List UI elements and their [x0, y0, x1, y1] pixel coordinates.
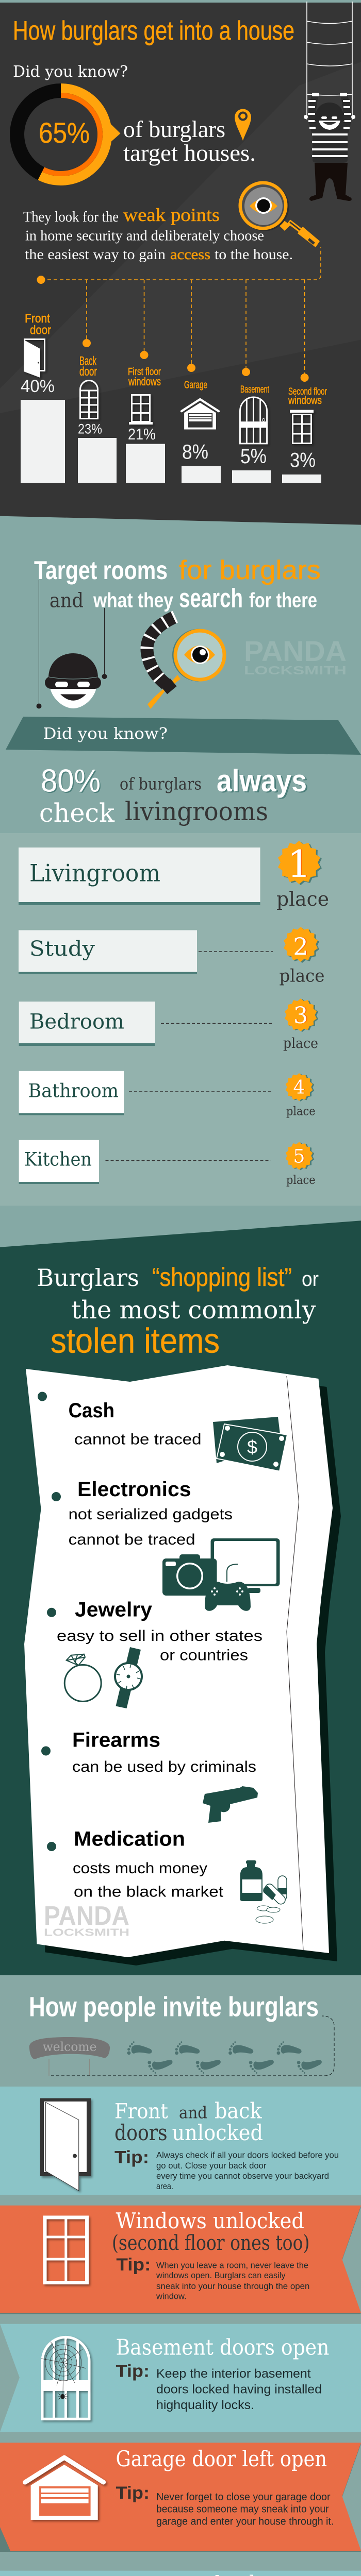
bar: garage 8%: 8%	[182, 441, 208, 464]
room: bathroom, 4th place: 4	[294, 1077, 306, 1098]
panel: shopping list	[0, 1221, 361, 1975]
room: study, 2nd place: 2	[294, 933, 309, 960]
room: study, 2nd place	[19, 927, 325, 986]
bar: basement 5%: Basement	[240, 384, 269, 395]
room: bedroom, 3rd place: 3	[293, 1003, 308, 1029]
watermark: panda locksmith: PANDA	[44, 1901, 129, 1931]
icon: basement window with spider web	[41, 2337, 91, 2419]
heading: target rooms for burglars: Target rooms	[34, 556, 168, 585]
text: 80 percent of burglars always check livingrooms: livingrooms	[125, 796, 268, 826]
room: bathroom, 4th place	[19, 1071, 316, 1118]
icon: tablet, camera and game controller	[162, 1538, 280, 1611]
bar: front door 40%: Front	[25, 312, 50, 326]
room: study, 2nd place: 2	[293, 933, 308, 960]
item: medication: on the black market	[74, 1883, 224, 1900]
heading: burglars shopping list: or	[302, 1268, 319, 1291]
room: bedroom, 3rd place: place	[283, 1036, 318, 1052]
item: electronics	[69, 1478, 280, 1611]
icon: magnifying glass with eye	[238, 181, 320, 247]
heading: target rooms for burglars: for there	[249, 589, 317, 612]
icon: window	[45, 2217, 87, 2282]
room: livingroom, 1st place: 1	[288, 842, 312, 886]
bar: back door 23%: Back	[79, 354, 97, 368]
tip panel: basement doors open: Basement doors open	[116, 2335, 329, 2360]
bar: first floor windows 21%: windows	[128, 375, 161, 388]
text: weak points: to the house.	[215, 247, 293, 263]
text: of burglars target houses: target houses.	[123, 140, 256, 166]
bar: garage 8%: Garage	[184, 380, 207, 391]
bar: back door 23%	[78, 354, 117, 483]
room: kitchen, 5th place: 5	[293, 1146, 305, 1167]
donut chart: 65 percent: 65%	[39, 116, 90, 149]
item: firearms	[72, 1729, 258, 1823]
text: 80 percent of burglars always check livingrooms: 80%	[42, 765, 102, 800]
welcome sign: welcome	[43, 2040, 97, 2054]
item: electronics: Electronics	[77, 1478, 191, 1501]
title: How burglars get into a house	[13, 16, 294, 46]
item: cash: Cash	[69, 1399, 114, 1422]
subheading: did you know: Did you know?	[13, 63, 128, 81]
item: electronics: not serialized gadgets	[69, 1506, 233, 1523]
room: bedroom, 3rd place	[19, 998, 318, 1052]
tip panel: basement doors open: highquality locks.	[156, 2398, 254, 2412]
tip panel: doors unlocked	[0, 2087, 361, 2195]
item: jewelry: or countries	[160, 1647, 248, 1664]
panel: how people invite burglars	[0, 1975, 361, 2576]
tip panel: doors unlocked: area.	[156, 2181, 173, 2191]
bar: first floor windows 21%: First floor	[128, 366, 161, 378]
connector dots	[37, 276, 309, 382]
item: cash	[69, 1399, 287, 1471]
bar: back door 23%: 23%	[78, 421, 102, 436]
tip panel: windows unlocked: Tip:	[116, 2255, 151, 2275]
dashed connector lines	[41, 247, 321, 375]
heading: target rooms for burglars: and	[50, 589, 84, 612]
room: livingroom, 1st place: place	[276, 888, 329, 910]
paper shadow	[32, 1374, 341, 1965]
heading: target rooms for burglars	[34, 555, 321, 614]
dashed path	[51, 2016, 334, 2076]
item: medication: Medication	[74, 1827, 185, 1850]
burglar mask on strings	[36, 580, 107, 709]
bar: basement 5%: 5%	[240, 445, 267, 468]
tip panel: windows unlocked: window.	[156, 2292, 187, 2301]
tip panel: garage door left open: garage and enter your house through it.	[156, 2516, 334, 2527]
bar: first floor windows 21%: 21%	[128, 425, 156, 443]
tip panel: windows unlocked	[0, 2206, 361, 2314]
heading: burglars shopping list	[37, 1263, 319, 1360]
icon: footprints	[127, 2041, 323, 2075]
item: jewelry	[57, 1599, 262, 1708]
tip panel: basement doors open: Keep the interior basement	[156, 2367, 311, 2381]
text: weak points: the easiest way to gain	[25, 247, 166, 263]
icon: diamond ring	[64, 1654, 101, 1701]
panel background: room ranking	[0, 833, 361, 1206]
tip panel: doors unlocked: Always check if all your doors locked before you	[156, 2150, 339, 2160]
icon: banknotes: $	[247, 1436, 257, 1458]
room: kitchen, 5th place: 5	[294, 1146, 306, 1167]
tip panel: basement doors open: Tip:	[116, 2362, 150, 2381]
item: electronics: cannot be traced	[69, 1531, 195, 1548]
bar: front door 40%	[21, 312, 65, 483]
room: kitchen, 5th place: place	[286, 1174, 316, 1187]
text: 80 percent of burglars always check livingrooms: of burglars	[120, 774, 202, 794]
donut chart: 65 percent	[14, 88, 121, 181]
bar: front door 40%: 40%	[21, 377, 55, 396]
text: 80 percent of burglars always check livingrooms: 80%	[41, 764, 101, 799]
heading: burglars shopping list: Burglars	[37, 1264, 139, 1292]
icon: wrist watch	[115, 1647, 142, 1708]
text: 80 percent of burglars always check livingrooms: always	[217, 764, 307, 798]
tip panel: garage door left open: Never forget to close your garage door	[156, 2492, 331, 2503]
text: weak points: weak points	[123, 205, 220, 225]
item: medication	[73, 1827, 287, 1923]
heading: target rooms for burglars: what they	[93, 589, 174, 612]
bar: garage 8%	[182, 380, 221, 483]
burglar hanging on a rope ladder	[304, 2, 355, 201]
item: medication: costs much money	[73, 1860, 207, 1877]
icon: pistol	[203, 1786, 258, 1823]
heading: target rooms for burglars: for burglars	[179, 555, 321, 585]
bar: second floor windows 3%: windows	[288, 395, 322, 406]
heading: burglars shopping list: the most commonly	[71, 1296, 316, 1325]
heading: burglars shopping list: “shopping list”	[152, 1263, 292, 1292]
tip panel: basement doors open	[0, 2324, 361, 2432]
tip panel: windows unlocked: (second floor ones too)	[112, 2231, 309, 2255]
item: jewelry: easy to sell in other states	[57, 1628, 262, 1645]
room: bathroom, 4th place: 4	[293, 1077, 305, 1098]
icon: arm holding magnifying glass	[147, 617, 226, 709]
tip panel: windows unlocked: windows open. Burglars can easily	[156, 2270, 286, 2280]
tip panel: doors unlocked: Tip:	[114, 2147, 149, 2167]
bar: second floor windows 3%	[282, 386, 327, 483]
room: study, 2nd place: place	[280, 965, 325, 986]
room: livingroom, 1st place: 1	[287, 842, 311, 886]
text: weak points: in home security and deliberately choose	[25, 228, 264, 244]
icon: location pin	[235, 109, 251, 141]
tip panel: garage door left open: Garage door left open	[116, 2446, 327, 2471]
room: bedroom, 3rd place: 3	[294, 1003, 309, 1029]
banner: did you know	[6, 717, 361, 755]
icon: pills and bottle	[240, 1860, 287, 1923]
tip panel: windows unlocked: When you leave a room, never leave the	[156, 2261, 308, 2270]
room: bathroom, 4th place: Bathroom	[28, 1081, 119, 1102]
icon: banknotes	[213, 1417, 287, 1471]
room: bathroom, 4th place: place	[286, 1105, 316, 1118]
tip panel: doors unlocked: every time you cannot observe your backyard	[156, 2171, 329, 2181]
text: of burglars target houses	[123, 116, 256, 166]
bar: second floor windows 3%: 3%	[290, 449, 316, 472]
icon: open door	[40, 2098, 91, 2191]
tip panel: overgrown shrubs	[0, 2571, 361, 2576]
heading: burglars shopping list: stolen items	[51, 1321, 220, 1360]
tip panel: garage door left open: because someone may sneak into your	[156, 2504, 329, 2515]
room: kitchen, 5th place: Kitchen	[24, 1149, 92, 1171]
text: 80 percent of burglars always check livingrooms: always	[218, 765, 308, 799]
item: firearms: can be used by criminals	[72, 1758, 256, 1775]
tip panel: doors unlocked: and	[179, 2103, 207, 2123]
text: 80 percent of burglars always check livingrooms: check	[39, 798, 115, 828]
room: livingroom, 1st place: Livingroom	[29, 859, 160, 887]
bar: back door 23%: door	[79, 365, 97, 379]
room: bedroom, 3rd place: Bedroom	[29, 1010, 124, 1033]
room: livingroom, 1st place	[19, 841, 329, 910]
text: weak points: They look for the	[23, 209, 119, 225]
bar: first floor windows 21%	[126, 366, 165, 483]
tip panel: garage door left open	[0, 2443, 361, 2552]
item: firearms: Firearms	[72, 1729, 160, 1752]
tip panel: doors unlocked: doors	[114, 2120, 168, 2145]
panel: target rooms	[0, 555, 361, 1206]
tip panel: doors unlocked: back	[215, 2098, 262, 2124]
tip panel: doors unlocked: unlocked	[172, 2120, 263, 2145]
icon: garage	[25, 2458, 104, 2520]
watermark: panda locksmith: PANDA	[244, 635, 347, 667]
room: kitchen, 5th place	[19, 1140, 316, 1187]
tip panel: windows unlocked: Windows unlocked	[116, 2208, 304, 2233]
text: of burglars target houses: of burglars	[123, 116, 225, 142]
tip panel: garage door left open: Tip:	[116, 2483, 150, 2503]
bar: front door 40%: door	[30, 324, 51, 337]
watermark: panda locksmith: LOCKSMITH	[44, 1927, 129, 1939]
heading: target rooms for burglars: search	[179, 584, 243, 614]
watermark: panda locksmith: LOCKSMITH	[244, 664, 347, 677]
bar: second floor windows 3%: Second floor	[288, 386, 327, 397]
tip panel: doors unlocked: Front	[114, 2100, 168, 2124]
room: study, 2nd place: Study	[29, 937, 95, 961]
text: 80 percent of burglars always check livingrooms	[39, 764, 308, 828]
panel: how burglars get into a house	[0, 2, 361, 525]
item: jewelry: Jewelry	[75, 1599, 153, 1621]
tip panel: windows unlocked: sneak into your house through the open	[156, 2281, 309, 2291]
banner: did you know: Did you know?	[43, 725, 168, 743]
item: cash: cannot be traced	[74, 1431, 202, 1448]
tip panel: basement doors open: doors locked having installed	[156, 2383, 322, 2397]
tip panel: doors unlocked: go out. Close your back door	[156, 2161, 267, 2171]
bar: basement 5%	[232, 384, 271, 483]
paper: stolen items list	[24, 1365, 333, 1957]
welcome sign	[29, 2037, 110, 2076]
text: weak points: access	[170, 247, 210, 263]
bar chart: entry points	[21, 312, 327, 483]
text: weak points	[23, 205, 293, 263]
